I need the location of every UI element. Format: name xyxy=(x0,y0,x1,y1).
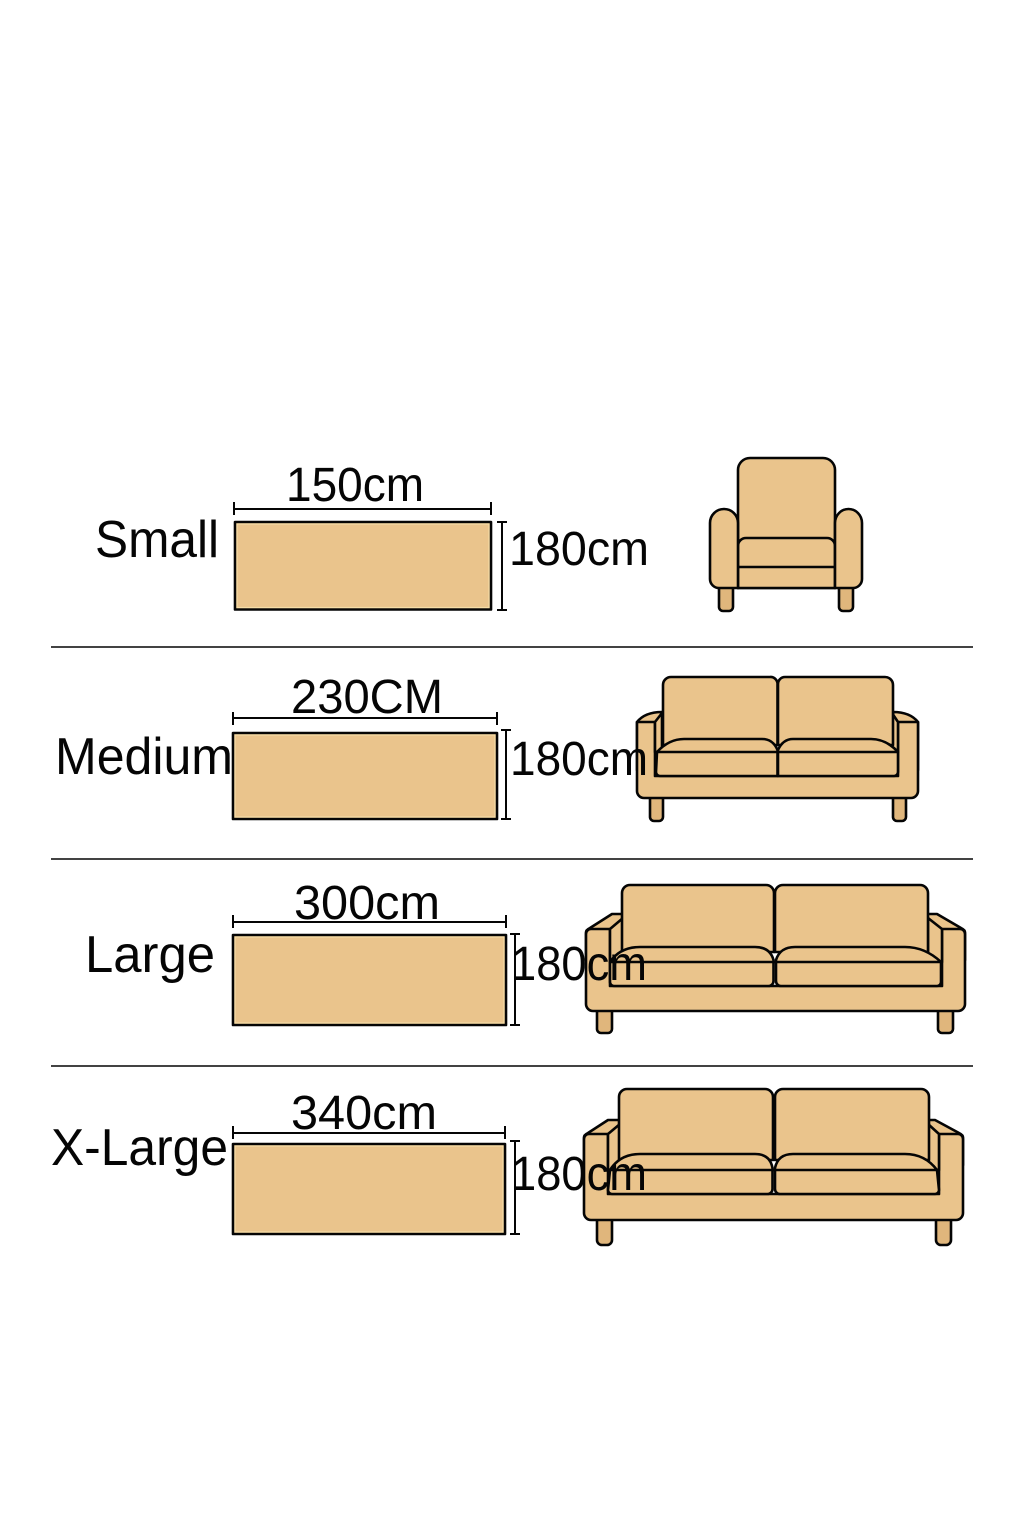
width dimension xyxy=(233,712,497,725)
width dimension xyxy=(233,1126,505,1139)
icon: two-seat sofa xyxy=(637,677,918,821)
label: Large: Large xyxy=(85,926,215,984)
label: 300cm: 300cm xyxy=(294,877,440,930)
label: 180cm small: 180cm xyxy=(509,523,649,576)
panel: small rug xyxy=(234,502,491,610)
height dimension: small xyxy=(497,522,507,610)
width dimension xyxy=(234,502,491,515)
label: 180cm x-large: 180cm xyxy=(511,1148,647,1201)
height dimension: x-large xyxy=(510,1141,520,1234)
label: X-Large: X-Large xyxy=(51,1119,228,1177)
label: Small: Small xyxy=(95,511,219,569)
label: 180cm medium: 180cm xyxy=(510,733,648,786)
height dimension: medium xyxy=(501,730,511,819)
icon: large sofa xyxy=(586,885,965,1033)
width dimension xyxy=(233,915,506,928)
panel: x-large rug xyxy=(233,1126,505,1234)
icon: extra-large sofa xyxy=(584,1089,963,1245)
label: 230CM: 230CM xyxy=(291,671,443,724)
label: Medium: Medium xyxy=(55,728,233,786)
label: 180cm large: 180cm xyxy=(511,938,647,991)
panel: large rug xyxy=(233,915,506,1025)
height dimension: large xyxy=(510,934,520,1025)
label: 340cm: 340cm xyxy=(291,1087,437,1140)
panel: medium rug xyxy=(233,712,497,819)
label: 150cm: 150cm xyxy=(286,459,424,512)
icon: armchair xyxy=(710,458,862,611)
